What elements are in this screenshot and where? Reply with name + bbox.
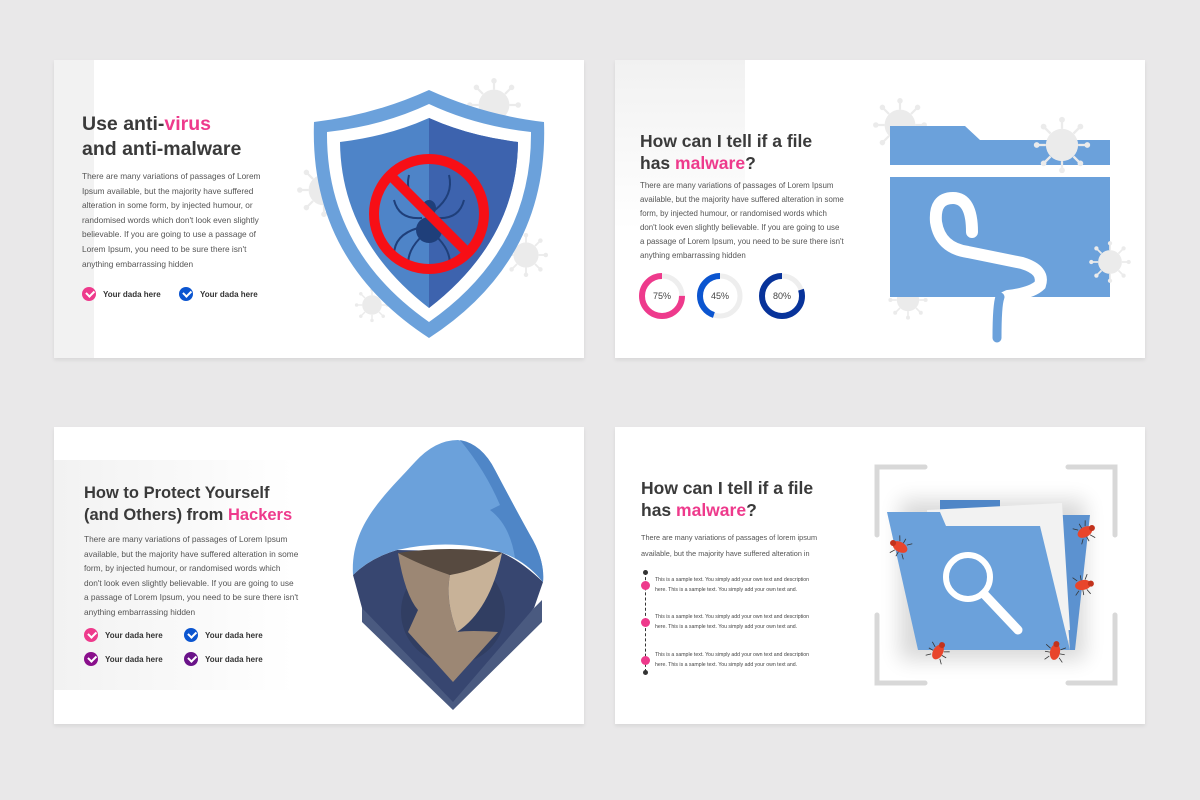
icon: shield with blocked spider xyxy=(297,78,548,338)
checklist item blue xyxy=(179,287,258,301)
icon: hooded hacker xyxy=(352,440,544,710)
checklist item pink: Your dada here xyxy=(105,630,163,640)
text block: file malware: There are many variations of passages of Lorem Ipsum available, but the majority have suffered alteration in some form, by injected humour, or randomised words which don't look even slightly believable. If you are going to use a passage of Lorem Ipsum, you need to be sure there isn't anything embarrassing hidden xyxy=(640,181,844,260)
heading: file malware: has malware? xyxy=(640,153,756,173)
heading: file malware xyxy=(640,131,812,173)
panel: anti-virus xyxy=(54,60,584,358)
checklist item blue: Your dada here xyxy=(205,630,263,640)
heading: file malware timeline xyxy=(641,478,813,520)
text block: anti-virus: There are many variations of passages of Lorem Ipsum available, but the majority have suffered alteration in some form, by injected humour, or randomised words which don't look even slightly believable. If you are going to use a passage of Lorem Ipsum, you need to be sure there isn't anything embarrassing hidden xyxy=(82,171,260,269)
heading: hackers: (and Others) from Hackers xyxy=(84,506,292,524)
chart: donut 45%: 45% xyxy=(711,291,729,301)
checklist item violet: Your dada here xyxy=(205,654,263,664)
chart: donut 75% xyxy=(639,273,685,319)
heading: anti-virus: and anti-malware xyxy=(82,138,241,160)
timeline: This is a sample text. You simply add your own text and description here. This is a sample text. You simply add your own text and. xyxy=(655,577,809,592)
checklist item pink xyxy=(82,287,161,301)
checklist item purple xyxy=(84,652,163,666)
timeline item 3 xyxy=(641,656,650,665)
checklist item blue: Your dada here xyxy=(200,290,258,298)
chart: donut 75%: 75% xyxy=(653,291,671,301)
heading: file malware timeline: has malware? xyxy=(641,500,757,520)
heading: anti-virus: Use anti-virus xyxy=(82,113,211,135)
timeline: This is a sample text. You simply add your own text and description here. This is a sample text. You simply add your own text and. xyxy=(655,652,809,668)
text block: intro: There are many variations of passages of lorem ipsum available, but the majority have suffered alteration in xyxy=(641,533,817,558)
heading: anti-virus xyxy=(82,113,241,160)
text block: hackers: There are many variations of passages of Lorem Ipsum available, but the majority have suffered alteration in some form, by injected humour, or randomised words which don't look even slightly believable. If you are going to use a passage of Lorem Ipsum, you need to be sure there isn't anything embarrassing hidden xyxy=(84,534,298,616)
panel: file malware donuts xyxy=(615,60,1145,358)
panel: file malware timeline xyxy=(615,427,1145,724)
checklist item pink: Your dada here xyxy=(103,290,161,298)
heading: hackers: How to Protect Yourself xyxy=(84,484,270,502)
chart: donut 80%: 80% xyxy=(773,291,791,301)
timeline: This is a sample text. You simply add your own text and description here. This is a sample text. You simply add your own text and. xyxy=(655,614,809,630)
checklist item violet xyxy=(184,652,263,666)
timeline xyxy=(641,570,809,675)
timeline item 2 xyxy=(641,618,650,627)
chart: donut 80% xyxy=(759,273,805,319)
icon: folder with magnifier and bugs xyxy=(874,464,1118,686)
heading: file malware: How can I tell if a file xyxy=(640,131,812,151)
panel: hackers xyxy=(54,427,584,724)
heading: hackers xyxy=(84,484,292,524)
chart: donut 45% xyxy=(697,273,742,318)
checklist item blue xyxy=(184,628,263,642)
checklist item purple: Your dada here xyxy=(105,654,163,664)
timeline item 1 xyxy=(641,581,650,590)
heading: file malware timeline: How can I tell if a file xyxy=(641,478,813,498)
icon: folder with worm xyxy=(873,98,1131,342)
checklist item pink xyxy=(84,628,163,642)
